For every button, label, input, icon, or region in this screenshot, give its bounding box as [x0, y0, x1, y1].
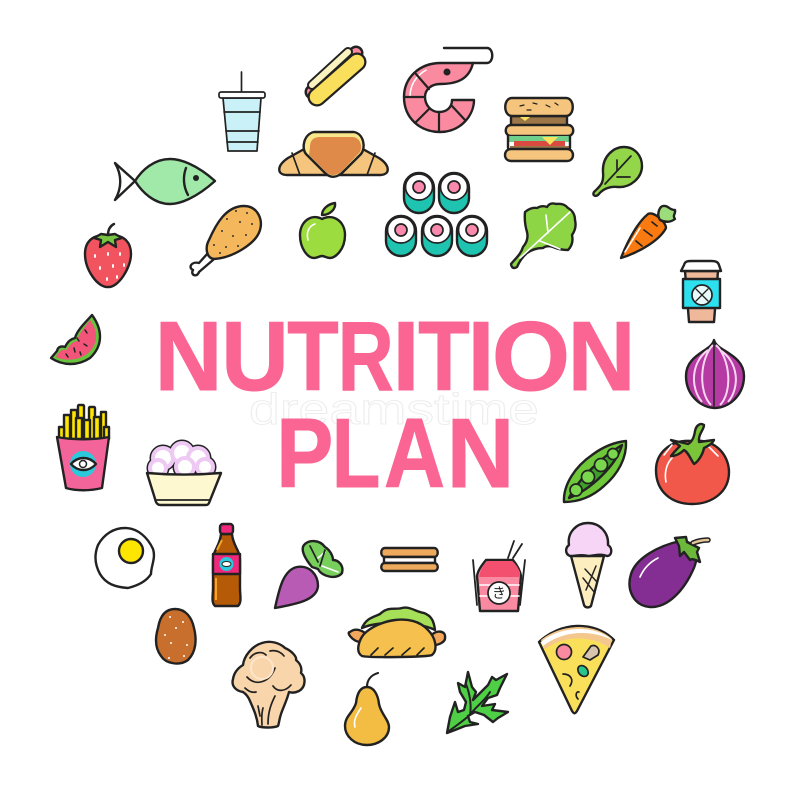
- icon: strawberry: [85, 224, 131, 287]
- icon: beetroot: [275, 541, 342, 608]
- title line: NUTRITION: I: [468, 301, 494, 411]
- icon: coffee cup: [681, 261, 721, 322]
- title line: NUTRITION: T: [418, 301, 470, 411]
- title line: PLAN: P: [276, 398, 333, 508]
- icon: pizza slice: [539, 626, 614, 713]
- title line: NUTRITION: N: [155, 301, 222, 411]
- icon: french fries: [57, 405, 109, 490]
- title line: NUTRITION: N: [568, 301, 635, 411]
- title line: NUTRITION: T: [287, 301, 339, 411]
- icon: apple: [300, 203, 345, 258]
- icon: tomato: [656, 424, 729, 504]
- icon: carrot: [621, 206, 675, 258]
- icon: taco: [349, 608, 445, 657]
- icon: sushi rolls: [386, 173, 487, 256]
- icon: hot dog: [312, 52, 357, 97]
- icon: fried egg: [96, 528, 154, 588]
- watermark: dreamstime: [249, 385, 539, 434]
- icon: pear: [345, 673, 389, 745]
- title line: PLAN: A: [384, 398, 445, 508]
- icon: chicken leg: [191, 206, 261, 275]
- icon: cauliflower: [233, 642, 305, 728]
- sushi roll 5: [457, 216, 487, 256]
- icon: ice cream cone: [566, 523, 611, 607]
- icon: fish: [115, 159, 215, 204]
- sushi roll 3: [386, 216, 416, 256]
- icon: parsley: [447, 672, 508, 733]
- title line: NUTRITION: O: [492, 301, 570, 411]
- title line: PLAN: [276, 398, 514, 508]
- icon: small sandwich: [381, 548, 438, 571]
- icon: burger: [505, 98, 573, 161]
- title line: NUTRITION: [155, 301, 635, 411]
- icon: eggplant: [630, 537, 708, 607]
- sushi roll 4: [422, 216, 452, 256]
- title line: NUTRITION: I: [392, 301, 420, 411]
- icon: spinach leaf: [593, 147, 642, 196]
- icon: watermelon slice: [51, 315, 100, 364]
- icon: takeout box: [473, 541, 525, 611]
- icon: croissant: [279, 132, 388, 177]
- title line: NUTRITION: U: [221, 301, 289, 411]
- sushi roll 1: [404, 173, 434, 213]
- icon: potato: [156, 609, 196, 663]
- title line: NUTRITION: R: [338, 301, 394, 411]
- title line: PLAN: N: [447, 398, 514, 508]
- icon: drink cup: [219, 72, 265, 151]
- icon: bowl of noodles: [147, 443, 221, 505]
- icon: takeout box: き: [492, 585, 506, 601]
- icon: shrimp: [404, 48, 492, 132]
- title line: PLAN: L: [332, 398, 380, 508]
- icon: onion: [686, 340, 744, 408]
- icon: lettuce leaf: [511, 203, 576, 268]
- sushi roll 2: [439, 173, 469, 213]
- title: nutrition plan: [155, 301, 635, 508]
- icon: pea pod: [564, 441, 626, 502]
- icon: soda bottle: [212, 524, 240, 606]
